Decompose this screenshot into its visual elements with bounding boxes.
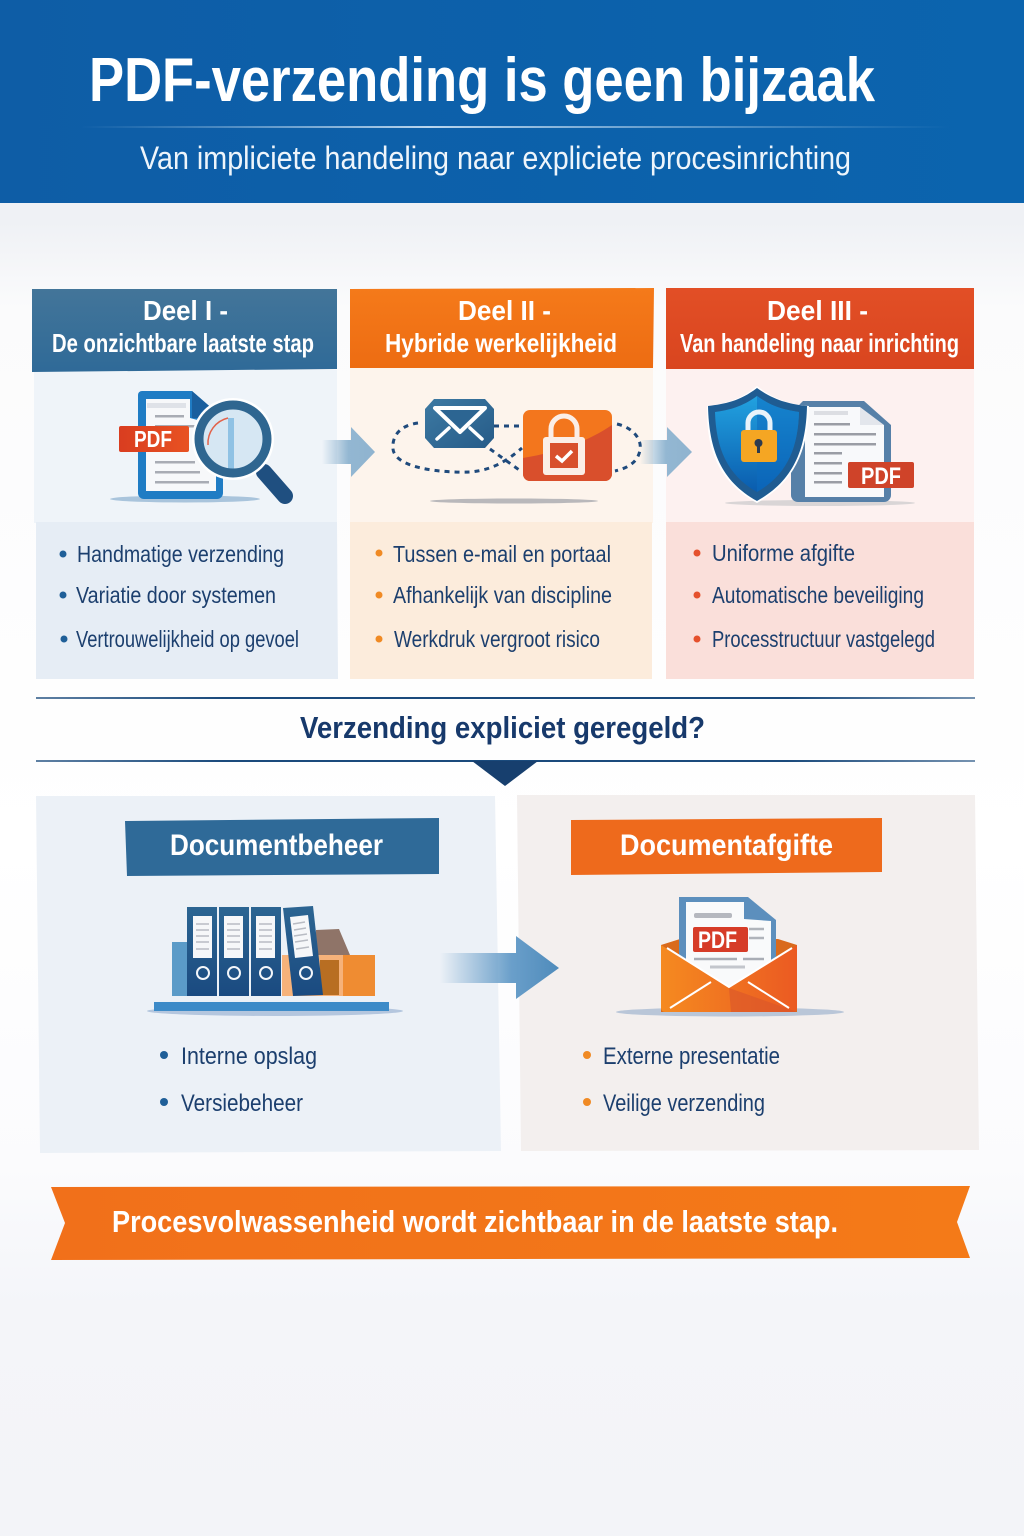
heading: Documentbeheer	[125, 818, 439, 876]
icon: shield with lock and PDF document: PDF	[861, 463, 901, 490]
bullet list: Externe presentatie	[603, 1043, 780, 1070]
heading: Documentafgifte	[571, 818, 882, 875]
panel: Deel I	[32, 289, 338, 679]
icon: document with magnifier	[110, 391, 285, 502]
bullet list	[694, 540, 935, 652]
question band	[36, 697, 975, 786]
bullet list: Handmatige verzending	[77, 541, 284, 567]
icon: binders on shelf	[147, 906, 403, 1016]
arrow: Deel II to Deel III	[640, 427, 692, 477]
bullet list	[376, 541, 612, 652]
heading: Documentafgifte: Documentafgifte	[620, 829, 833, 862]
icon: envelope and padlock with dashed loop	[393, 399, 640, 504]
heading: Deel I: Deel I -	[143, 295, 228, 326]
question heading: Verzending expliciet geregeld?	[300, 710, 705, 745]
heading: Deel I: De onzichtbare laatste stap	[52, 328, 314, 358]
heading: Deel II	[350, 288, 654, 368]
bullet list: Processtructuur vastgelegd	[712, 626, 935, 652]
heading: Deel III: Deel III -	[767, 295, 868, 326]
heading: Deel II: Deel II -	[458, 295, 551, 326]
bullet list: Uniforme afgifte	[712, 540, 855, 566]
conclusion banner: Procesvolwassenheid wordt zichtbaar in de laatste stap.	[112, 1204, 838, 1239]
title: PDF-verzending is geen bijzaak	[89, 46, 875, 115]
bullet list: Vertrouwelijkheid op gevoel	[76, 626, 299, 652]
panel: Deel II	[350, 288, 654, 679]
heading: Deel III	[666, 288, 974, 369]
icon: envelope with PDF	[616, 897, 844, 1016]
bullet list: Tussen e-mail en portaal	[393, 541, 611, 567]
heading: Documentbeheer: Documentbeheer	[170, 829, 383, 862]
bullet list	[583, 1043, 780, 1117]
panel: Deel III	[666, 288, 974, 679]
heading: Deel II: Hybride werkelijkheid	[385, 328, 617, 358]
subtitle: Van impliciete handeling naar expliciete procesinrichting	[140, 140, 851, 176]
bullet list: Versiebeheer	[181, 1090, 303, 1117]
bullet list	[60, 541, 299, 652]
bullet list: Werkdruk vergroot risico	[394, 626, 600, 652]
conclusion banner	[51, 1186, 970, 1260]
icon: document with magnifier: PDF	[134, 426, 172, 452]
bullet list: Afhankelijk van discipline	[393, 582, 612, 608]
arrow: Documentbeheer to Documentafgifte	[440, 936, 559, 999]
icon: envelope with PDF: PDF	[698, 927, 737, 954]
panel: Documentbeheer	[36, 796, 501, 1153]
arrow: Deel I to Deel II	[322, 427, 375, 477]
heading: Deel I	[32, 289, 337, 372]
panel: Documentafgifte	[517, 795, 979, 1151]
bullet list: Interne opslag	[181, 1043, 317, 1070]
header band	[0, 0, 1024, 203]
bullet list: Veilige verzending	[603, 1090, 765, 1117]
bullet list: Variatie door systemen	[76, 582, 276, 608]
bullet list: Automatische beveiliging	[712, 582, 924, 608]
bullet list	[160, 1043, 317, 1117]
icon: shield with lock and PDF document	[707, 386, 915, 506]
